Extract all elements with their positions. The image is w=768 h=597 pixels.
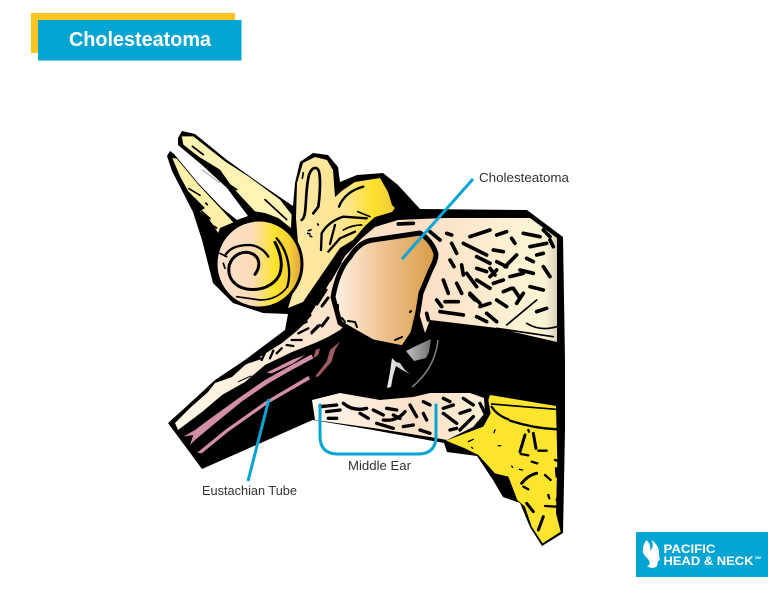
black silhouette	[167, 131, 565, 546]
vestibule black lines	[302, 168, 370, 252]
mastoid black details	[468, 404, 558, 530]
cochlea spiral	[220, 238, 289, 300]
logo: Pacific Head & Neck: HEAD & NECK	[664, 554, 754, 568]
title banner: Cholesteatoma	[69, 29, 212, 51]
title banner	[31, 13, 242, 60]
vestibule body	[288, 157, 395, 308]
cholesteatoma mass	[333, 233, 436, 348]
leader line: cholesteatoma	[402, 179, 473, 259]
strip dashes near tube	[175, 322, 320, 420]
lower bone pores	[320, 398, 485, 433]
ossicle gray fragments	[387, 339, 438, 388]
tube and strip bone pores	[293, 262, 340, 332]
icon: head flame	[643, 540, 660, 568]
lower semicircular canal	[172, 158, 233, 233]
logo: Pacific Head & Neck: SM	[755, 555, 762, 560]
ear anatomy illustration	[167, 131, 565, 546]
logo: Pacific Head & Neck	[636, 532, 768, 577]
cholesteatoma speckle	[338, 305, 411, 340]
leader line: eustachian tube	[248, 399, 269, 481]
upper temporal bone	[175, 218, 557, 430]
label: cholesteatoma: Cholesteatoma	[479, 170, 570, 185]
bracket: middle ear	[320, 405, 436, 454]
cochlea	[216, 220, 302, 308]
lower bone plate	[312, 393, 485, 440]
label: middle ear: Middle Ear	[348, 458, 412, 473]
upper semicircular canal	[182, 136, 292, 228]
mastoid yellow region	[446, 395, 561, 543]
eustachian tube pink muscle	[183, 342, 340, 453]
upper bone pores	[398, 223, 557, 337]
logo: Pacific Head & Neck: PACIFIC	[664, 542, 716, 556]
label: eustachian tube: Eustachian Tube	[202, 483, 297, 498]
